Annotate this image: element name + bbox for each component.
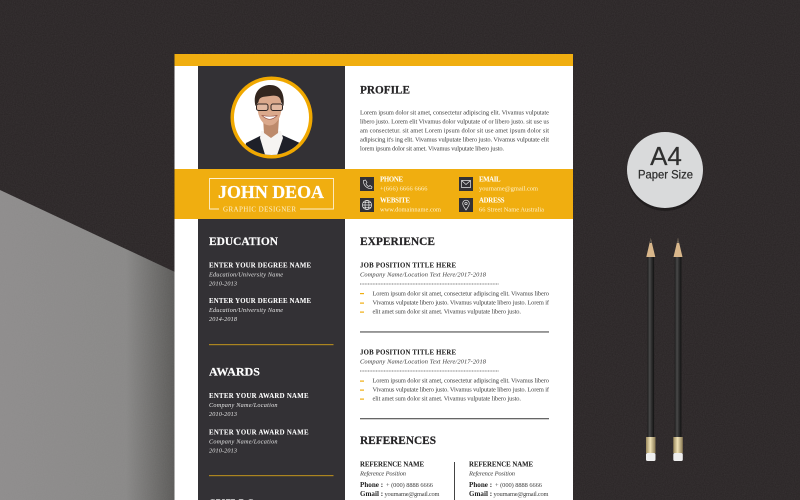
experience heading: EXPERIENCE <box>360 235 435 248</box>
contact: phone: +(666) 6666 6666 <box>380 186 428 192</box>
award entry 2 <box>209 430 309 454</box>
profile paragraph: am consectetur. sit amet Lorem ipsum dolor sit use amet ipsum dolor sit <box>360 128 549 134</box>
pencil 2 <box>673 238 683 461</box>
education section <box>208 235 311 323</box>
contact: address: ADRESS <box>479 198 505 204</box>
name plate <box>210 178 334 214</box>
award entry 2: ENTER YOUR AWARD NAME <box>209 430 309 436</box>
education entry 1: ENTER YOUR DEGREE NAME <box>209 262 311 270</box>
education entry 1: 2010-2013 <box>209 280 237 288</box>
profile paragraph: lorem ipsum dolor sit amet. Vivamus vulputate libero justo. <box>360 146 504 152</box>
awards section <box>209 366 309 454</box>
portrait photo <box>230 76 312 160</box>
reference 2: REFERENCE NAME <box>469 462 533 468</box>
job entry 1: JOB POSITION TITLE HERE <box>360 262 456 270</box>
job entry 2: Vivamus vulputate libero justo. Vivamus vulputate libero justo. Lorem if <box>372 386 550 394</box>
profile paragraph <box>360 110 550 152</box>
job entry 2: JOB POSITION TITLE HERE <box>360 350 456 356</box>
job entry 2: Company Name/Location Text Here/2017-2018 <box>360 358 487 366</box>
contact: website <box>360 198 441 214</box>
education heading: EDUCATION <box>209 235 279 248</box>
contact: website: www.domainname.com <box>380 206 441 214</box>
job title: GRAPHIC DESIGNER <box>223 206 296 214</box>
contact: email: EMAIL <box>479 176 501 184</box>
reference 1: + (000) 8888 6666 <box>386 482 433 489</box>
dark sidebar <box>198 66 345 500</box>
name: JOHN DEOA <box>218 182 324 202</box>
award entry 1: 2010-2013 <box>209 411 237 418</box>
reference 2: Gmail : <box>469 490 492 498</box>
contact: email: yourname@gmail.com <box>479 186 538 192</box>
experience section <box>360 235 550 419</box>
job entry 1: Company Name/Location Text Here/2017-2018 <box>360 272 487 279</box>
reference 2: Phone : <box>469 481 492 489</box>
contact: phone: PHONE <box>380 176 403 184</box>
profile paragraph: libero justo. Lorem elit Vivamus dolor vulputate of or libero justo. sit use us <box>360 118 550 126</box>
job entry 2: Lorem ipsum dolor sit amet, consectetur adipiscing elit. Vivamus libero <box>372 378 549 385</box>
education entry 1: Education/University Name <box>208 272 283 278</box>
education entry 2: ENTER YOUR DEGREE NAME <box>209 298 311 305</box>
profile heading: PROFILE <box>360 84 410 96</box>
profile paragraph: Lorem ipsum dolor sit amet, consectetur adipiscing elit. Vivamus vulputate <box>360 110 549 116</box>
reference 2: Reference Position <box>468 470 515 478</box>
education entry 1 <box>208 262 311 288</box>
contact: phone <box>360 176 428 192</box>
job entry 2: elit amet sum dolor sit amet. Vivamus vulputate libero justo. <box>372 396 521 402</box>
reference 1: yourname@gmail.com <box>384 491 440 498</box>
reference 2: yourname@gmail.com <box>494 491 549 498</box>
education entry 2: Education/University Name <box>208 307 283 314</box>
badge: A4 paper size: A4 <box>650 141 682 171</box>
contact: address: 66 Street Name Australia <box>479 206 544 214</box>
job entry 2 <box>360 350 550 402</box>
contact: email <box>459 176 538 192</box>
job entry 1: Vivamus vulputate libero justo. Vivamus vulputate libero justo. Lorem if <box>372 300 550 307</box>
contact: address <box>459 198 544 214</box>
reference 2: + (000) 8888 6666 <box>495 482 542 489</box>
contact: website: WEBSITE <box>380 198 410 204</box>
award entry 1 <box>209 393 309 418</box>
reference 1: Gmail : <box>360 490 383 498</box>
resume sheet <box>174 54 573 500</box>
award entry 1: ENTER YOUR AWARD NAME <box>209 393 309 400</box>
education entry 2: 2014-2018 <box>209 316 238 323</box>
reference 1: REFERENCE NAME <box>360 462 424 468</box>
awards heading: AWARDS <box>209 366 260 378</box>
award entry 2: 2010-2013 <box>209 448 237 454</box>
badge: A4 paper size <box>627 132 703 211</box>
top yellow bar <box>174 54 573 66</box>
pencil 1 <box>646 238 656 461</box>
yellow contact band <box>174 169 573 219</box>
reference 1: Phone : <box>360 481 383 489</box>
reference 1 <box>359 462 440 498</box>
education entry 2 <box>208 298 311 323</box>
job entry 1: elit amet sum dolor sit amet. Vivamus vulputate libero justo. <box>372 308 521 316</box>
references heading: REFERENCES <box>360 434 436 447</box>
award entry 1: Company Name/Location <box>209 402 278 409</box>
award entry 2: Company Name/Location <box>209 438 278 446</box>
reference 2 <box>468 462 549 498</box>
reference 1: Reference Position <box>359 470 406 478</box>
job entry 1: Lorem ipsum dolor sit amet, consectetur adipiscing elit. Vivamus libero <box>372 291 549 298</box>
job entry 1 <box>360 262 550 316</box>
badge: A4 paper size: Paper Size <box>638 168 693 182</box>
profile paragraph: adipiscing it's ing elit. Vivamus vulputate libero justo. Vivamus vulputate elit <box>360 136 549 144</box>
profile section <box>360 84 550 152</box>
references section <box>359 434 549 500</box>
background: gray diagonal panel <box>0 190 175 500</box>
